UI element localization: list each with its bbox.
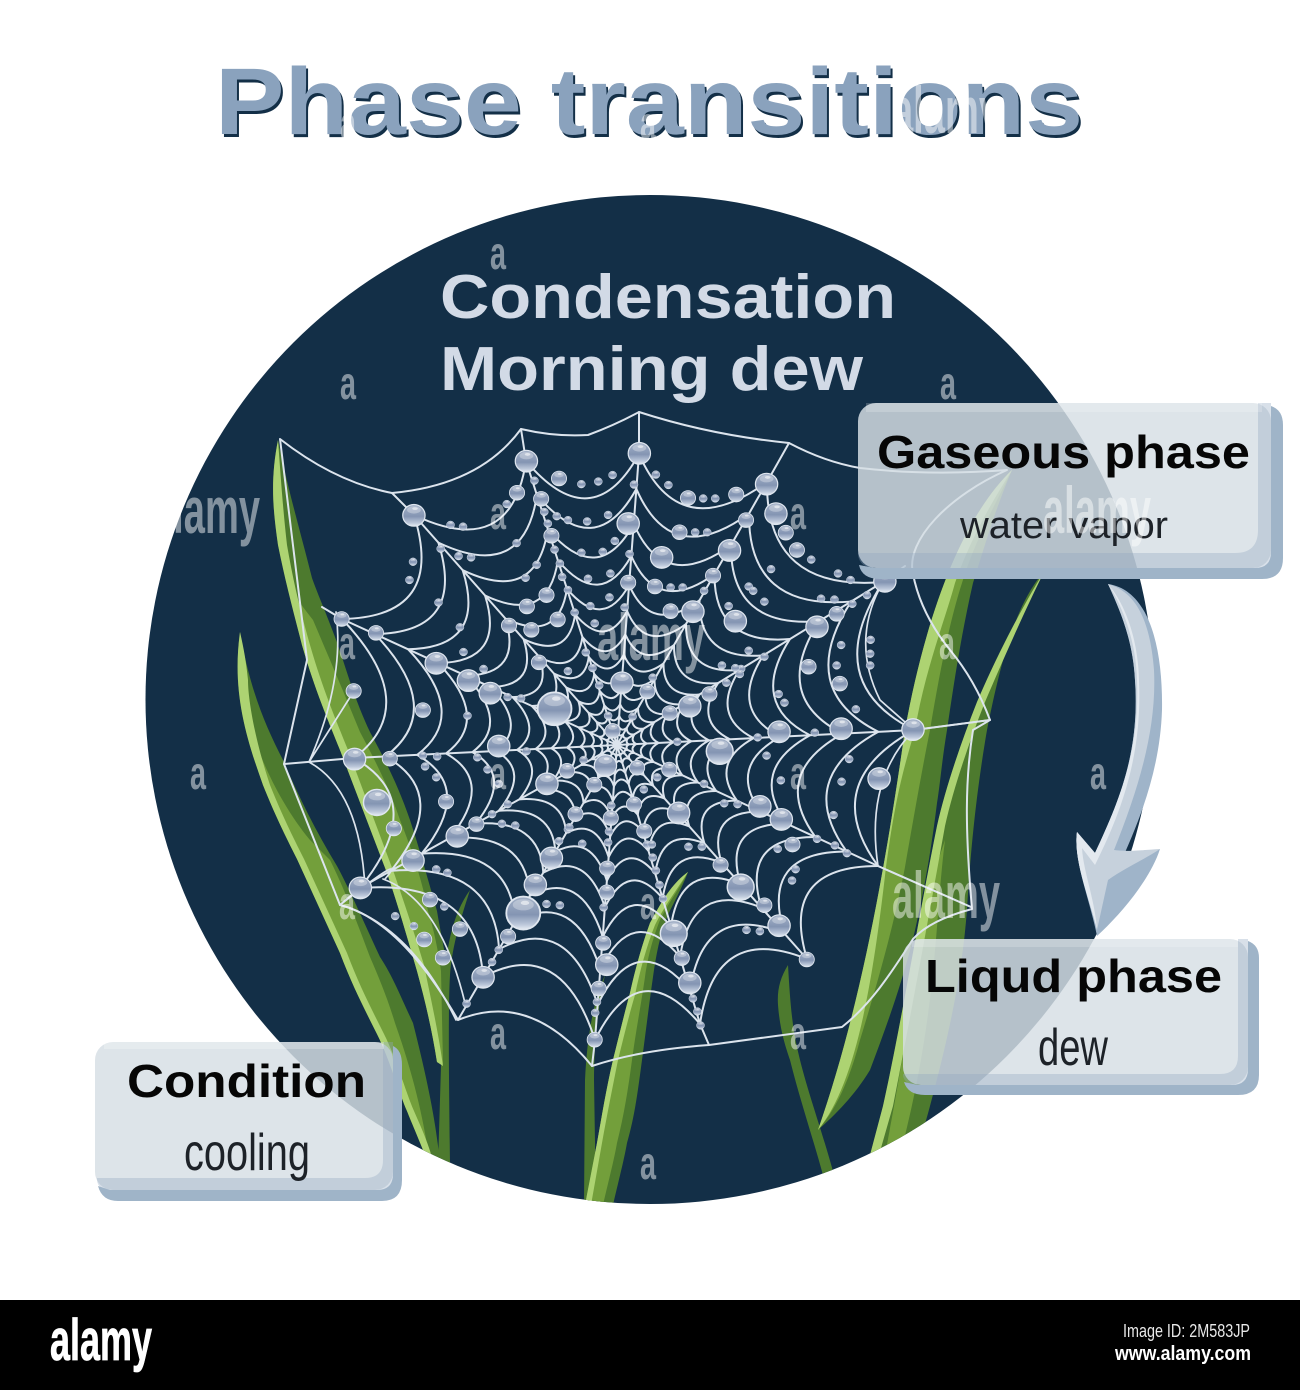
- watermarks: a: [640, 97, 656, 149]
- background circle: [146, 195, 1154, 1204]
- leaf: small blade behind left leaf: [438, 890, 470, 1165]
- watermarks: a: [339, 877, 355, 929]
- box inner bevel: [903, 939, 1248, 1085]
- watermarks: a: [340, 97, 356, 149]
- box face: [95, 1042, 393, 1190]
- leaf: centre: [585, 872, 688, 1205]
- box face: [858, 403, 1271, 568]
- watermarks: alamy: [152, 473, 260, 547]
- leaf: thin blade lower right: [778, 965, 834, 1175]
- watermarks: alamy: [892, 73, 1000, 147]
- box: gaseous phase: [858, 403, 1283, 579]
- watermarks: a: [490, 227, 506, 279]
- leaf: lower left: [238, 632, 440, 1165]
- dew droplets: [334, 443, 924, 1047]
- watermarks: alamy: [1043, 473, 1151, 547]
- watermarks: a: [790, 487, 806, 539]
- leaf: tall left: [273, 440, 448, 1066]
- watermarks: a: [939, 617, 955, 669]
- subtext: cooling: [184, 1124, 310, 1182]
- subtext: water vapor: [959, 505, 1168, 547]
- watermarks: alamy: [597, 600, 705, 674]
- web: outer frame thread: [280, 412, 1007, 1066]
- box: liquid phase: [903, 939, 1259, 1095]
- box: condition: [95, 1042, 402, 1201]
- web: radial spokes: [284, 412, 990, 1066]
- circle heading: [440, 263, 896, 404]
- watermarks: a: [940, 357, 956, 409]
- box face: [903, 939, 1248, 1085]
- watermarks: a: [640, 877, 656, 929]
- circle heading: Morning dew: [440, 335, 864, 404]
- watermarks: a: [490, 1007, 506, 1059]
- watermarks: a: [340, 357, 356, 409]
- watermarks: a: [339, 617, 355, 669]
- watermarks: a: [490, 487, 506, 539]
- box lower edge: [859, 406, 1283, 579]
- watermarks: a: [490, 747, 506, 799]
- image id: Image ID: 2M583JP: [1123, 1321, 1250, 1341]
- heading: Liqud phase: [925, 950, 1222, 1002]
- watermarks: a: [1090, 747, 1106, 799]
- box inner bevel: [858, 403, 1271, 568]
- heading: Condition: [127, 1055, 366, 1107]
- web: inner anchoring threads: [309, 582, 990, 1020]
- watermarks: a: [790, 1007, 806, 1059]
- subtext: dew: [1038, 1019, 1108, 1077]
- box inner bevel: [97, 1042, 393, 1190]
- leaf: tall right: [818, 470, 1012, 1130]
- logo: alamy: [50, 1308, 152, 1373]
- spider web: [280, 412, 1007, 1066]
- box lower edge: [98, 1046, 402, 1201]
- watermarks: [152, 73, 1151, 1189]
- leaf: right front: [870, 570, 1045, 1155]
- watermarks: alamy: [892, 858, 1000, 932]
- title: Phase transitions: [215, 49, 1083, 155]
- watermarks: a: [640, 1137, 656, 1189]
- web: concentric spiral rings: [342, 454, 914, 1040]
- grass leaves: [238, 440, 1045, 1205]
- bottom credit bar: [0, 1300, 1300, 1390]
- curved arrow: gaseous to liquid: [1076, 584, 1162, 936]
- box lower edge: [904, 941, 1259, 1095]
- watermarks: a: [790, 747, 806, 799]
- leaf: thin blade behind centre: [584, 975, 605, 1205]
- circle heading: Condensation: [440, 263, 896, 332]
- website: www.alamy.com: [1114, 1343, 1251, 1365]
- watermarks: a: [190, 747, 206, 799]
- heading: Gaseous phase: [877, 426, 1250, 478]
- title: Phase transitions: [217, 52, 1085, 158]
